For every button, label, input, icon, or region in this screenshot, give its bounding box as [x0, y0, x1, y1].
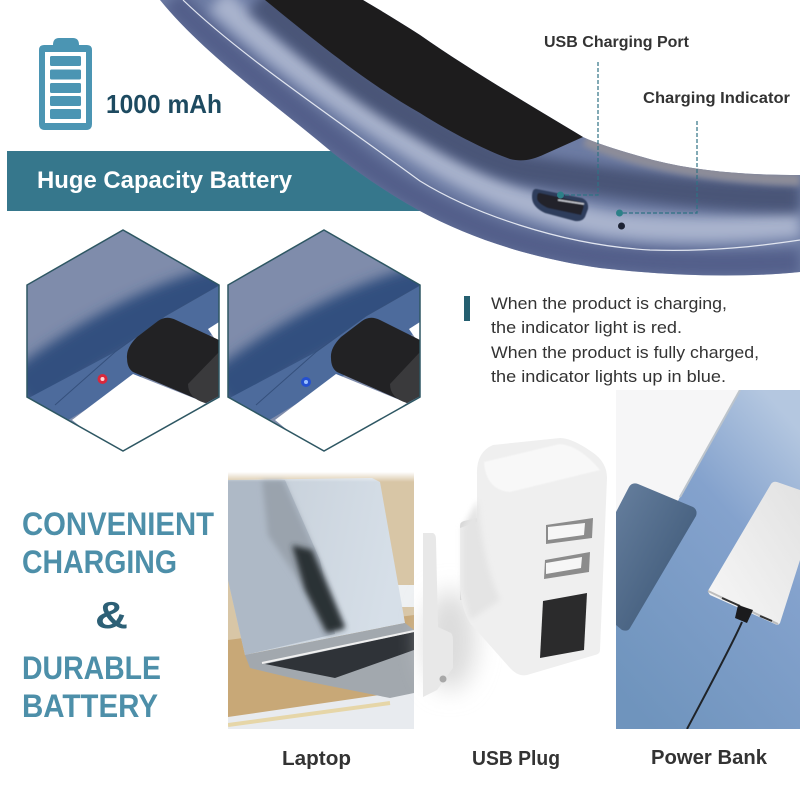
hexagon: red indicator — [26, 229, 220, 452]
black fabric strip — [265, 0, 583, 160]
description text: When the product is fully charged, — [491, 344, 759, 362]
label: USB Charging Port — [544, 34, 689, 198]
banner: Huge Capacity Battery — [7, 151, 432, 211]
label: USB Charging Port: USB Charging Port — [544, 34, 689, 51]
red LED — [98, 374, 108, 384]
heading: convenient charging and durable battery: CONVENIENT — [22, 506, 214, 542]
label: Charging Indicator: Charging Indicator — [643, 90, 790, 107]
white power bank — [708, 482, 800, 625]
description text — [464, 295, 759, 386]
black label patch — [540, 593, 587, 658]
heading: convenient charging and durable battery — [22, 506, 214, 724]
photo: laptop — [228, 472, 414, 729]
outer dark edge — [172, 0, 800, 264]
label: Charging Indicator — [616, 90, 790, 216]
light zone above the seam — [218, 0, 800, 229]
capacity label: 1000 mAh — [106, 89, 222, 119]
description text: When the product is charging, — [491, 295, 727, 313]
banner: Huge Capacity Battery: Huge Capacity Battery — [37, 167, 293, 194]
caption: Power Bank: Power Bank — [651, 747, 768, 769]
USB sockets — [546, 518, 593, 544]
heading: convenient charging and durable battery: DURABLE — [22, 650, 161, 686]
photo: power bank — [616, 390, 800, 729]
heading: convenient charging and durable battery: & — [95, 595, 128, 637]
hexagon: blue indicator — [227, 229, 421, 452]
blue LED — [301, 377, 311, 387]
indicator hole — [618, 222, 625, 230]
heading: convenient charging and durable battery: CHARGING — [22, 544, 177, 580]
photo: USB plug — [423, 438, 607, 697]
neckband product photo — [160, 0, 800, 275]
caption: Laptop: Laptop — [282, 748, 351, 770]
dark zone next to fabric — [258, 0, 800, 198]
heading: convenient charging and durable battery: BATTERY — [22, 688, 158, 724]
description text: the indicator light is red. — [491, 319, 682, 337]
icon: battery — [39, 38, 92, 130]
caption: USB Plug: USB Plug — [472, 748, 560, 770]
micro USB port — [532, 189, 588, 221]
description text: the indicator lights up in blue. — [491, 368, 726, 386]
seam — [183, 0, 800, 250]
grey top shoulder — [585, 140, 800, 180]
dark power bank — [616, 483, 697, 631]
